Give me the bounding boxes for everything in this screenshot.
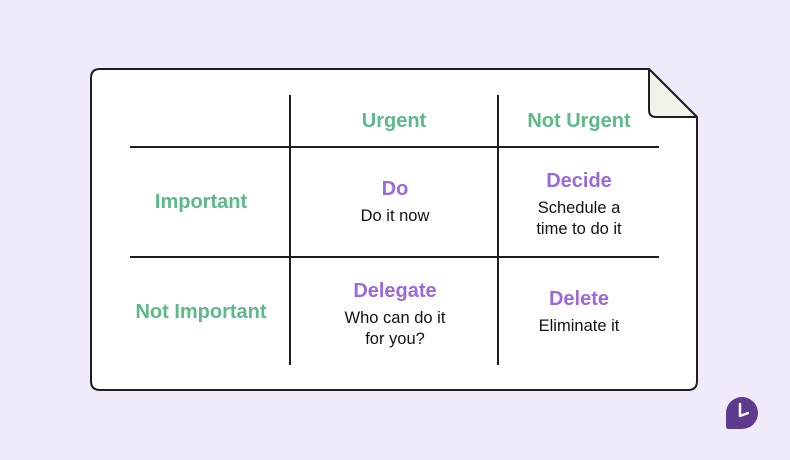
row headings: Important	[155, 191, 247, 213]
cell: Delegate: Who can do it	[345, 309, 446, 327]
row headings: Not Important	[135, 301, 267, 323]
cell: Decide: time to do it	[536, 220, 622, 238]
cell: Delegate	[345, 280, 446, 348]
cell: Decide	[536, 170, 622, 238]
cell: Delegate: Delegate	[353, 280, 437, 302]
icon: logo	[726, 397, 758, 429]
cell: Do: Do	[382, 178, 408, 200]
cell: Delegate: for you?	[365, 330, 425, 348]
column headings: Not Urgent	[527, 110, 631, 132]
cell: Decide: Decide	[546, 170, 612, 192]
icon: folded corner	[649, 69, 697, 117]
cell: Do	[361, 178, 429, 225]
column headings: Urgent	[362, 110, 427, 132]
panel: card	[91, 69, 697, 390]
cell: Delete: Eliminate it	[539, 317, 620, 335]
cell: Delete: Delete	[549, 288, 609, 310]
column headings	[362, 110, 631, 132]
row headings	[135, 191, 267, 323]
cell: Delete	[539, 288, 620, 335]
cell: Decide: Schedule a	[538, 199, 621, 217]
cell: Do: Do it now	[361, 207, 429, 225]
